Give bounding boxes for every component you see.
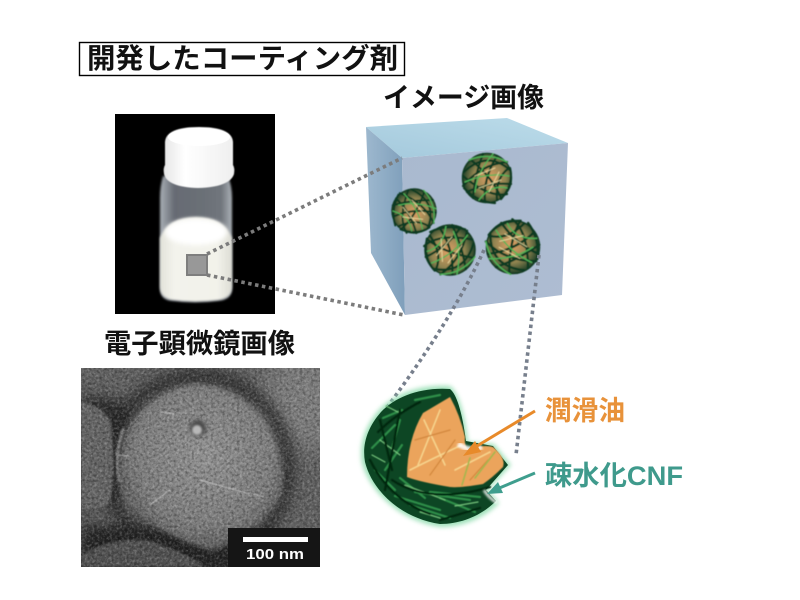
bright crescent between particles [117,428,124,482]
micrograph [81,368,320,567]
label: hydrophobized CNF: 疎水化CNF [545,461,683,491]
neighbour particles [81,402,113,510]
vial glass [160,176,232,302]
green shell [364,389,508,524]
notch highlight [458,444,482,449]
label: lubricating oil: 潤滑油 [545,396,625,426]
scale bar: 100 nm [246,546,304,563]
oil core [407,397,504,487]
title: 開発したコーティング剤 [87,42,398,74]
glow [361,386,511,527]
heading: electron microscope image: 電子顕微鏡画像 [104,329,295,359]
darker lower band [81,525,241,575]
photo: vial of coating agent [115,114,275,314]
cube [366,118,568,315]
dotted zoom lines [207,158,539,455]
emulsion [160,217,232,302]
cutaway particle [361,386,511,527]
halo around main particle [108,376,288,560]
vial cap [164,127,234,188]
arrow: lubricant [463,411,535,456]
main particle [120,385,282,551]
scale bar [228,528,320,567]
dark band top-left [81,396,130,512]
lighter upper-right background [258,368,320,456]
heading: image: イメージ画像 [383,83,544,113]
core fibres [410,410,495,485]
arrow: hydrophobized CNF [487,473,535,494]
shell fibres [370,395,490,520]
surface highlights [118,412,264,505]
zoom marker on vial [187,255,207,275]
particles in cube [385,153,551,285]
surface dimple [190,420,206,436]
